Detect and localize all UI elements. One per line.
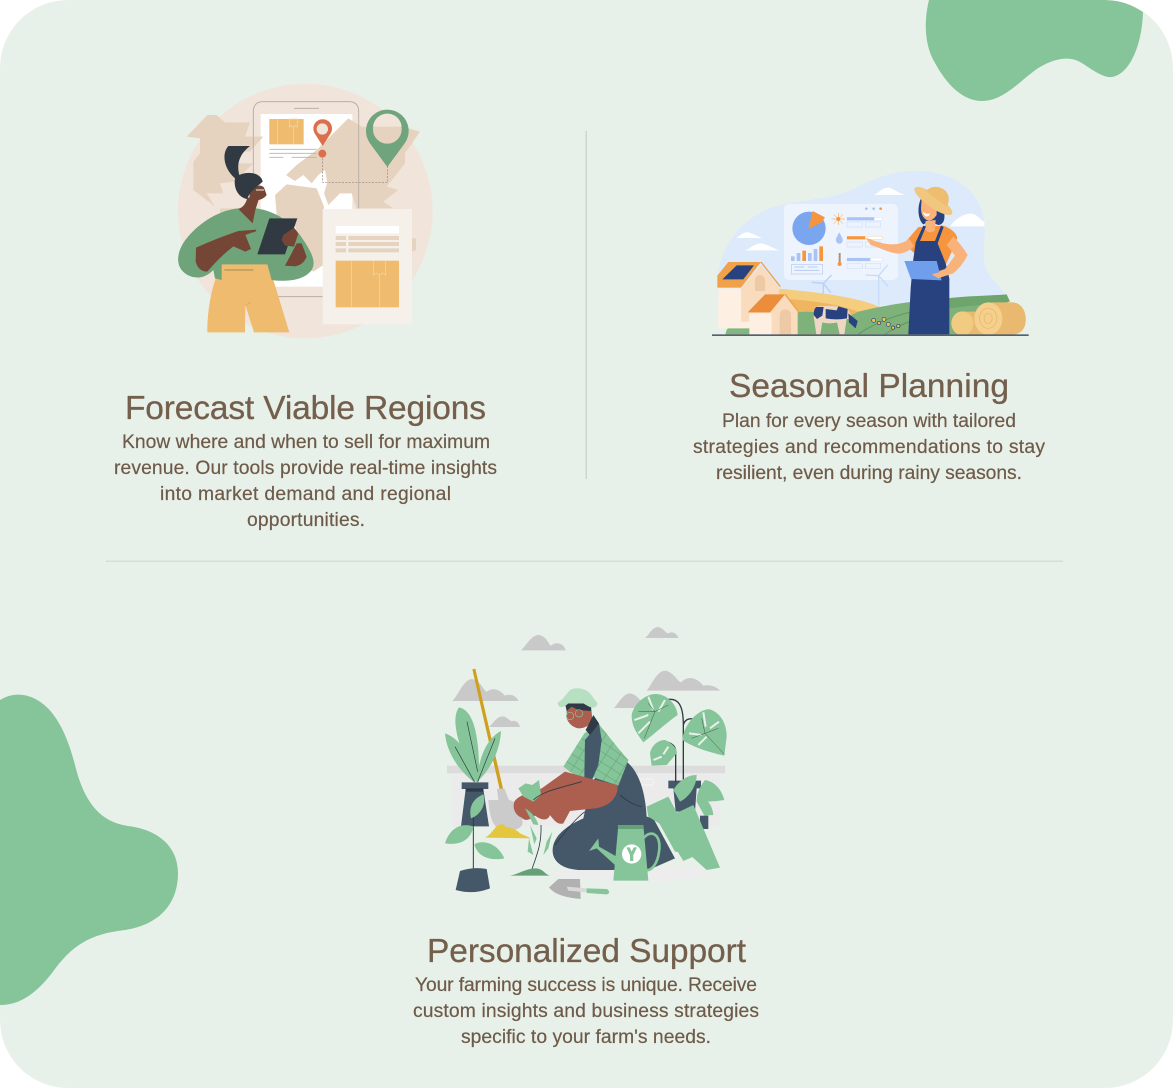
fields (777, 288, 882, 334)
blue sky blob (718, 171, 1010, 305)
trousers (207, 263, 289, 332)
overall strap (584, 723, 602, 781)
lines on phone (269, 149, 317, 157)
cow (814, 306, 853, 334)
divider: vertical (586, 131, 587, 479)
trouser body (553, 757, 675, 870)
arms (514, 772, 618, 824)
face (249, 186, 267, 200)
hip arm (932, 237, 968, 278)
bars (791, 253, 812, 261)
text block: Seasonal Planning (693, 368, 1045, 484)
red pin (313, 119, 332, 146)
body: Know where and when to sell for maximum (122, 432, 490, 453)
shirt (563, 723, 628, 786)
trowel (549, 879, 609, 899)
seedling (532, 825, 541, 870)
boot (647, 797, 693, 861)
sweater (178, 208, 314, 281)
clouds (452, 627, 720, 727)
weather icons (836, 217, 840, 221)
ground line (712, 334, 1029, 336)
illustration: woman with tablet and map (178, 84, 433, 338)
body: opportunities. (247, 510, 365, 531)
woman (178, 146, 314, 332)
heading: Seasonal Planning (729, 368, 1009, 405)
body: strategies and recommendations to stay (693, 437, 1045, 458)
far arm (285, 243, 307, 266)
face (921, 198, 937, 221)
divider: horizontal (106, 560, 1063, 562)
hat (911, 183, 956, 219)
head (567, 705, 592, 728)
shovel (472, 669, 503, 791)
hair front (925, 197, 942, 215)
wind turbines (812, 275, 832, 308)
glasses (256, 188, 264, 191)
monstera plant right (632, 694, 727, 829)
hair (224, 146, 263, 199)
body: Plan for every season with tailored (722, 411, 1016, 432)
tablet (904, 261, 942, 280)
body: into market demand and regional (160, 484, 451, 505)
potted plant left (445, 707, 501, 826)
hat (558, 688, 598, 708)
heading: Personalized Support (427, 933, 747, 970)
body: custom insights and business strategies (413, 1001, 759, 1022)
body (693, 411, 1045, 484)
overalls (908, 226, 949, 334)
back hair (919, 198, 944, 225)
ground shadow (552, 865, 712, 882)
green pin (366, 110, 409, 167)
wall (447, 766, 725, 773)
soil pile (485, 824, 531, 838)
text block: Forecast Viable Regions (114, 390, 497, 531)
body (413, 975, 759, 1048)
body: revenue. Our tools provide real-time insights (114, 458, 497, 479)
clouds (737, 188, 984, 250)
dashed route (323, 158, 388, 182)
background circle (178, 84, 433, 338)
flower in hands (518, 780, 541, 802)
illustration: seasonal planning farmer (712, 171, 1029, 336)
pointing arm (866, 238, 914, 254)
progress bars (847, 217, 882, 220)
body: resilient, even during rainy seasons. (716, 463, 1022, 484)
blob: top right (926, 0, 1143, 101)
pie chart (792, 212, 826, 245)
neck (238, 198, 259, 223)
houses (726, 324, 760, 334)
neck (924, 220, 936, 232)
hand on tablet (282, 228, 298, 247)
dashboard panel (784, 204, 898, 280)
text block: Personalized Support (413, 933, 759, 1048)
pointing arm (196, 230, 256, 272)
shirt (904, 226, 957, 265)
phone screen (261, 114, 352, 287)
heading: Forecast Viable Regions (125, 390, 486, 427)
document panel (323, 209, 412, 324)
body: specific to your farm's needs. (461, 1027, 711, 1048)
small plant front left (445, 794, 504, 892)
illustration: gardener planting (445, 627, 727, 899)
hay bales (962, 312, 1005, 334)
world map (187, 115, 420, 272)
flowers (872, 317, 900, 329)
farmer woman (866, 183, 968, 334)
parcel card on phone (269, 119, 304, 144)
blob: left (0, 695, 178, 1005)
phone outline (253, 102, 359, 297)
body: Your farming success is unique. Receive (415, 975, 757, 996)
tablet (257, 218, 297, 254)
body (114, 432, 497, 531)
glasses (566, 710, 583, 720)
watering can (589, 825, 659, 881)
